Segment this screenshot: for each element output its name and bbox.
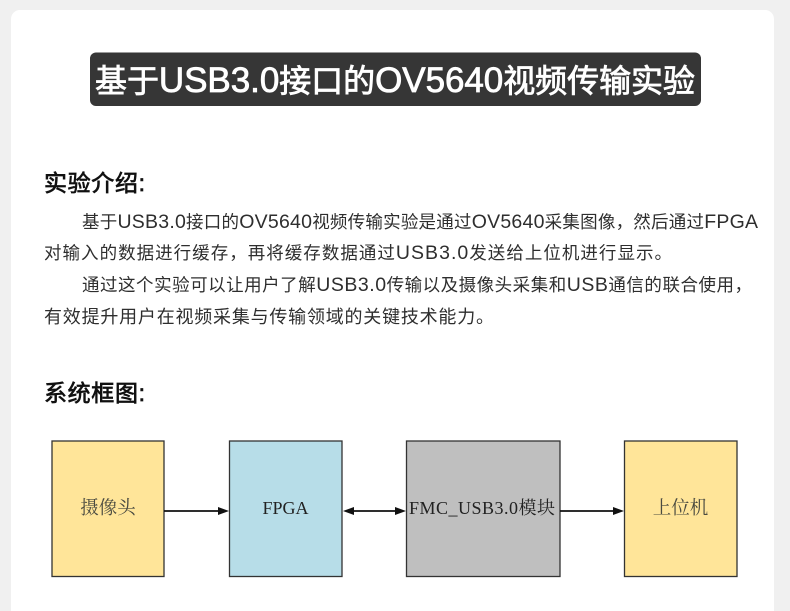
arrow: camera to FPGA <box>164 507 229 515</box>
box: FPGA: FPGA <box>262 498 309 518</box>
box: host computer <box>624 441 737 576</box>
block diagram <box>52 441 737 576</box>
text block: introduction <box>44 211 758 327</box>
box: FMC_USB3.0 module <box>406 441 560 576</box>
box: FMC_USB3.0 module: FMC_USB3.0模块 <box>409 498 555 518</box>
box: camera <box>52 441 164 576</box>
box: host computer: 上位机 <box>653 498 708 519</box>
box: camera: 摄像头 <box>80 498 136 519</box>
arrow: FPGA to USB module, bidirectional <box>343 507 406 515</box>
box: FPGA <box>230 441 342 576</box>
heading: experiment introduction: 实验介绍: <box>44 170 145 196</box>
text block: introduction: 对输入的数据进行缓存，再将缓存数据通过USB3.0发送给上位机进行显示。 <box>44 242 672 264</box>
text block: introduction: 基于USB3.0接口的OV5640视频传输实验是通过OV5640采集图像，然后通过FPGA <box>82 211 758 233</box>
title banner: 基于USB3.0接口的OV5640视频传输实验 <box>95 61 695 100</box>
heading: system block diagram: 系统框图: <box>44 380 145 406</box>
text block: introduction: 有效提升用户在视频采集与传输领域的关键技术能力。 <box>44 307 494 327</box>
arrow: USB module to host computer <box>560 507 624 515</box>
text block: introduction: 通过这个实验可以让用户了解USB3.0传输以及摄像头采集和USB通信的联合使用， <box>82 274 752 296</box>
